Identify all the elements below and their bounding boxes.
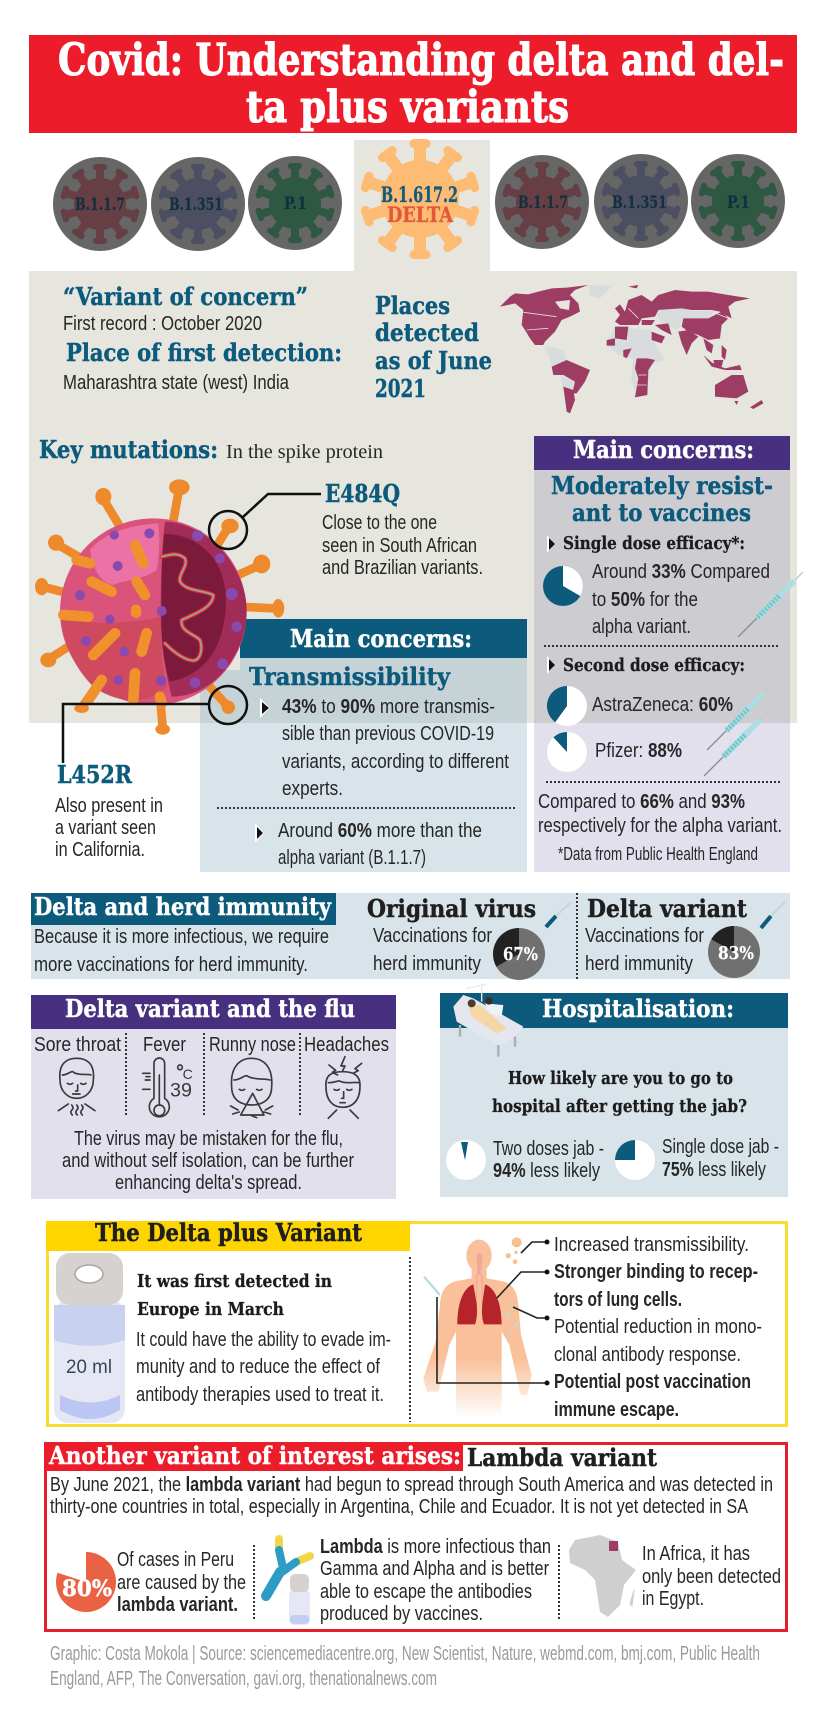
right variant icons: B.1.351 [612,193,667,213]
panel: vaccine resistance main concerns: Main concerns: [573,435,754,464]
callout: E484Q: seen in South African [322,535,477,557]
delta virus icon: DELTA [387,202,454,227]
right variant icons [495,154,785,249]
places detected heading: Places [375,291,450,320]
variant of concern text [63,282,342,394]
right variant icons: P.1 [727,193,750,213]
left variant icons: B.1.351 [169,195,223,215]
panel: delta and herd immunity: Vaccinations for [373,925,492,947]
panel: lambda variant: 80% [62,1576,112,1602]
panel: lambda variant: Of cases in Peru [117,1549,234,1571]
virus illustration [35,479,284,735]
callout: E484Q: and Brazilian variants. [322,557,483,579]
panel: hospitalisation [440,983,788,1197]
key mutations heading [39,435,383,464]
panel: delta plus variant [46,1218,786,1426]
panel: transmissibility main concerns: experts. [282,778,343,800]
panel: lambda variant: able to escape the antibodies [320,1581,532,1603]
panel: delta and herd immunity: herd immunity [373,953,481,975]
panel: delta plus variant: Stronger binding to recep- [554,1261,758,1283]
panel: delta variant and the flu: The virus may be mistaken for the flu, [74,1128,343,1150]
panel: delta variant and the flu: Fever [143,1034,186,1056]
panel: lambda variant: In Africa, it has [642,1543,750,1565]
panel: hospitalisation: How likely are you to go to [508,1068,733,1089]
panel: delta and herd immunity: Because it is more infectious, we require [34,926,329,948]
panel: delta variant and the flu: and without self isolation, can be further [62,1150,354,1172]
panel: vaccine resistance main concerns: Compared to 66% and 93% [538,791,745,813]
panel: lambda variant: in Egypt. [642,1588,704,1610]
panel: delta variant and the flu: Runny nose [209,1034,296,1056]
panel: vaccine resistance main concerns: Second dose efficacy: [563,655,745,676]
panel: delta and herd immunity: Vaccinations for [585,925,704,947]
title banner [29,35,797,133]
panel: delta and herd immunity: Delta variant [587,894,747,923]
callout: L452R: Also present in [55,795,163,817]
panel: delta variant and the flu: Sore throat [34,1034,121,1056]
panel: transmissibility main concerns: Transmissibility [249,662,451,691]
panel: hospitalisation: Single dose jab - [662,1136,779,1158]
places detected heading: as of June [375,346,492,375]
panel: hospitalisation: 94% less likely [493,1160,600,1182]
world map [500,285,763,413]
places detected heading: detected [375,318,479,347]
panel: delta plus variant: clonal antibody response. [554,1344,741,1366]
callout: L452R: a variant seen [55,817,156,839]
panel: lambda variant: Gamma and Alpha and is better [320,1558,549,1580]
panel: delta and herd immunity: 83% [718,943,754,964]
panel: vaccine resistance main concerns: Pfizer: 88% [595,740,682,762]
panel: hospitalisation: 75% less likely [662,1159,766,1181]
panel: delta plus variant: 20 ml [66,1357,112,1378]
panel: vaccine resistance main concerns: Around 33% Compared [592,561,770,583]
left variant icons [53,156,342,251]
panel: vaccine resistance main concerns: ant to vaccines [572,498,751,527]
panel: delta plus variant: It could have the ability to evade im- [136,1329,391,1351]
panel: vaccine resistance main concerns: Single dose efficacy*: [563,533,745,554]
background panel: delta column and upper beige [29,140,797,723]
right variant icons: B.1.1.7 [518,193,568,213]
variant of concern text: First record : October 2020 [63,313,262,335]
panel: delta plus variant: The Delta plus Variant [95,1218,362,1247]
panel: transmissibility main concerns: variants, according to different [282,751,509,773]
variant of concern text: Maharashtra state (west) India [63,372,290,394]
variant of concern text: “Variant of concern” [63,282,308,311]
left variant icons: P.1 [284,194,307,214]
panel: delta variant and the flu: Delta variant and the flu [65,994,355,1023]
places detected heading [375,291,492,403]
panel: delta plus variant: It was first detected in [137,1271,332,1292]
panel: delta plus variant: immune escape. [554,1399,679,1421]
panel: transmissibility main concerns: sible than previous COVID-19 [282,723,494,745]
panel: delta plus variant: Potential reduction in mono- [554,1316,762,1338]
panel: lambda variant: only been detected [642,1566,781,1588]
panel: delta plus variant: munity and to reduce the effect of [136,1356,380,1378]
callout: E484Q: Close to the one [322,512,437,534]
panel: lambda variant: Another variant of interest arises: [48,1441,461,1470]
title banner: ta plus variants [246,82,569,133]
panel: delta plus variant: Potential post vaccination [554,1371,751,1393]
panel: delta and herd immunity: more vaccinations for herd immunity. [34,954,308,976]
panel: transmissibility main concerns [200,619,527,872]
panel: delta plus variant: Increased transmissibility. [554,1234,749,1256]
panel: lambda variant: produced by vaccines. [320,1603,483,1625]
panel: hospitalisation: Two doses jab - [493,1138,604,1160]
panel: lambda variant: Lambda variant [467,1443,657,1472]
panel: delta plus variant: antibody therapies used to treat it. [136,1384,384,1406]
panel: transmissibility main concerns: alpha variant (B.1.1.7) [278,847,426,869]
panel: delta variant and the flu: C [183,1066,193,1082]
key mutations heading: In the spike protein [226,441,383,463]
panel: delta and herd immunity [31,892,790,980]
callout: E484Q: E484Q [325,479,400,508]
source footer: England, AFP, The Conversation, gavi.org, thenationalnews.com [50,1668,437,1690]
panel: delta variant and the flu: enhancing delta's spread. [115,1172,302,1194]
delta virus icon [365,144,475,254]
panel: vaccine resistance main concerns: alpha variant. [592,616,691,638]
panel: vaccine resistance main concerns [534,435,803,872]
panel: delta and herd immunity: herd immunity [585,953,693,975]
callout: L452R: L452R [57,760,133,789]
callout: E484Q [209,479,483,579]
panel: vaccine resistance main concerns: respectively for the alpha variant. [538,815,782,837]
callout: L452R: in California. [55,839,145,861]
panel: lambda variant: are caused by the [117,1572,246,1594]
panel: transmissibility main concerns: Around 60% more than the [278,820,482,842]
panel: lambda variant: lambda variant. [117,1594,238,1616]
callout: L452R [55,686,247,861]
panel: hospitalisation: Hospitalisation: [542,994,734,1023]
panel: lambda variant [44,1441,786,1630]
key mutations heading: Key mutations: [39,435,218,464]
panel: vaccine resistance main concerns: to 50% for the [592,589,698,611]
panel: transmissibility main concerns: Main concerns: [290,624,472,653]
panel: delta plus variant: tors of lung cells. [554,1289,682,1311]
panel: vaccine resistance main concerns: *Data from Public Health England [558,844,758,864]
panel: hospitalisation: hospital after getting the jab? [492,1096,747,1117]
panel: delta plus variant: Europe in March [137,1299,284,1320]
variant of concern text: Place of first detection: [66,338,342,367]
panel: delta variant and the flu: 39 [170,1081,192,1102]
left variant icons: B.1.1.7 [75,195,125,215]
panel: delta and herd immunity: 67% [503,944,538,965]
panel: delta variant and the flu [31,994,396,1199]
delta virus icon: B.1.617.2 [381,182,458,207]
panel: delta variant and the flu: Headaches [304,1034,389,1056]
panel: vaccine resistance main concerns: AstraZeneca: 60% [592,694,733,716]
panel: delta and herd immunity: Original virus [367,894,536,923]
places detected heading: 2021 [375,374,426,403]
panel: delta and herd immunity: Delta and herd immunity [34,892,332,921]
panel: lambda variant: Lambda is more infectious than [320,1536,551,1558]
panel: vaccine resistance main concerns: Moderately resist- [551,471,773,500]
panel: transmissibility main concerns: 43% to 90% more transmis- [282,696,495,718]
source footer [50,1643,760,1690]
